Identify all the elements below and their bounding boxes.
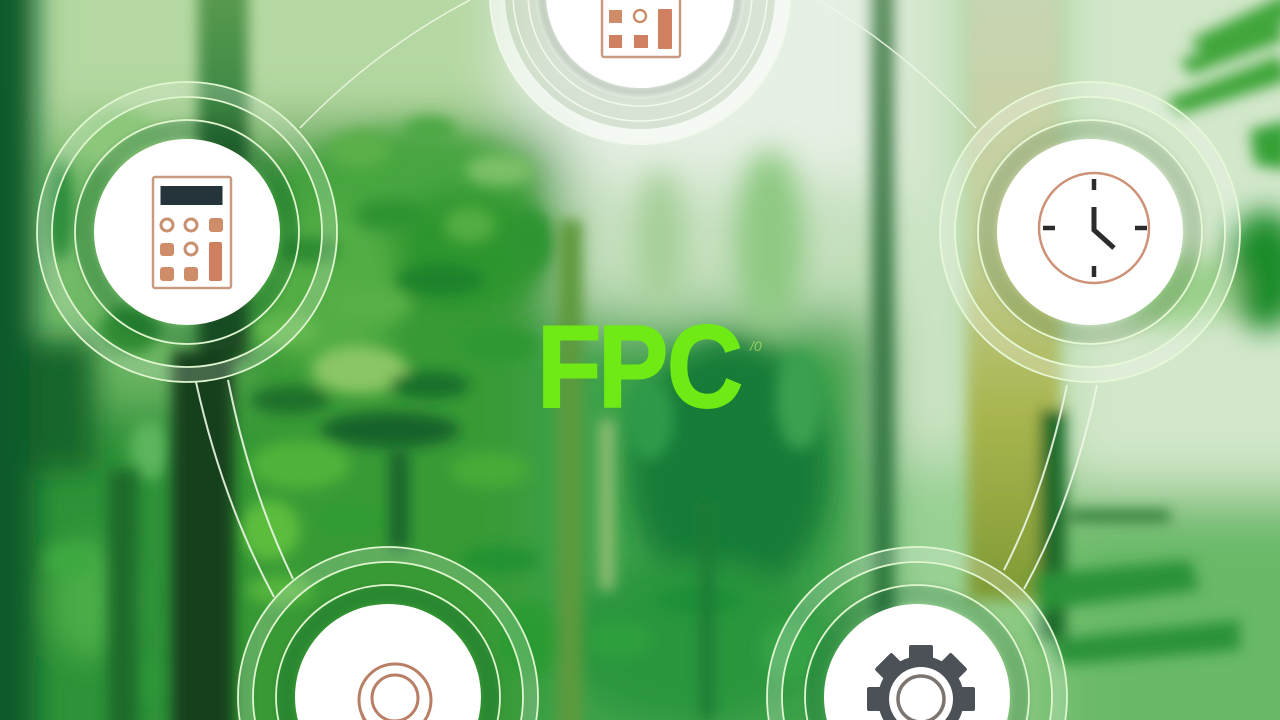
icon: gear	[867, 645, 975, 720]
icon: clock	[1039, 173, 1149, 283]
icon: calculator keypad	[602, 0, 680, 57]
node: gear (bottom right, cropped)	[767, 547, 1067, 720]
node: medal (bottom left, cropped)	[238, 547, 538, 720]
icon: calculator	[153, 177, 231, 288]
node: calculator (top, cropped)	[490, 0, 790, 144]
node: calculator (left)	[37, 82, 337, 382]
icon: medal	[359, 664, 431, 720]
small faint mark beside title: /0	[749, 338, 762, 354]
node: clock (right)	[940, 82, 1240, 382]
connecting arcs between rings	[196, 0, 1097, 597]
title: FPC: FPC	[537, 301, 743, 432]
